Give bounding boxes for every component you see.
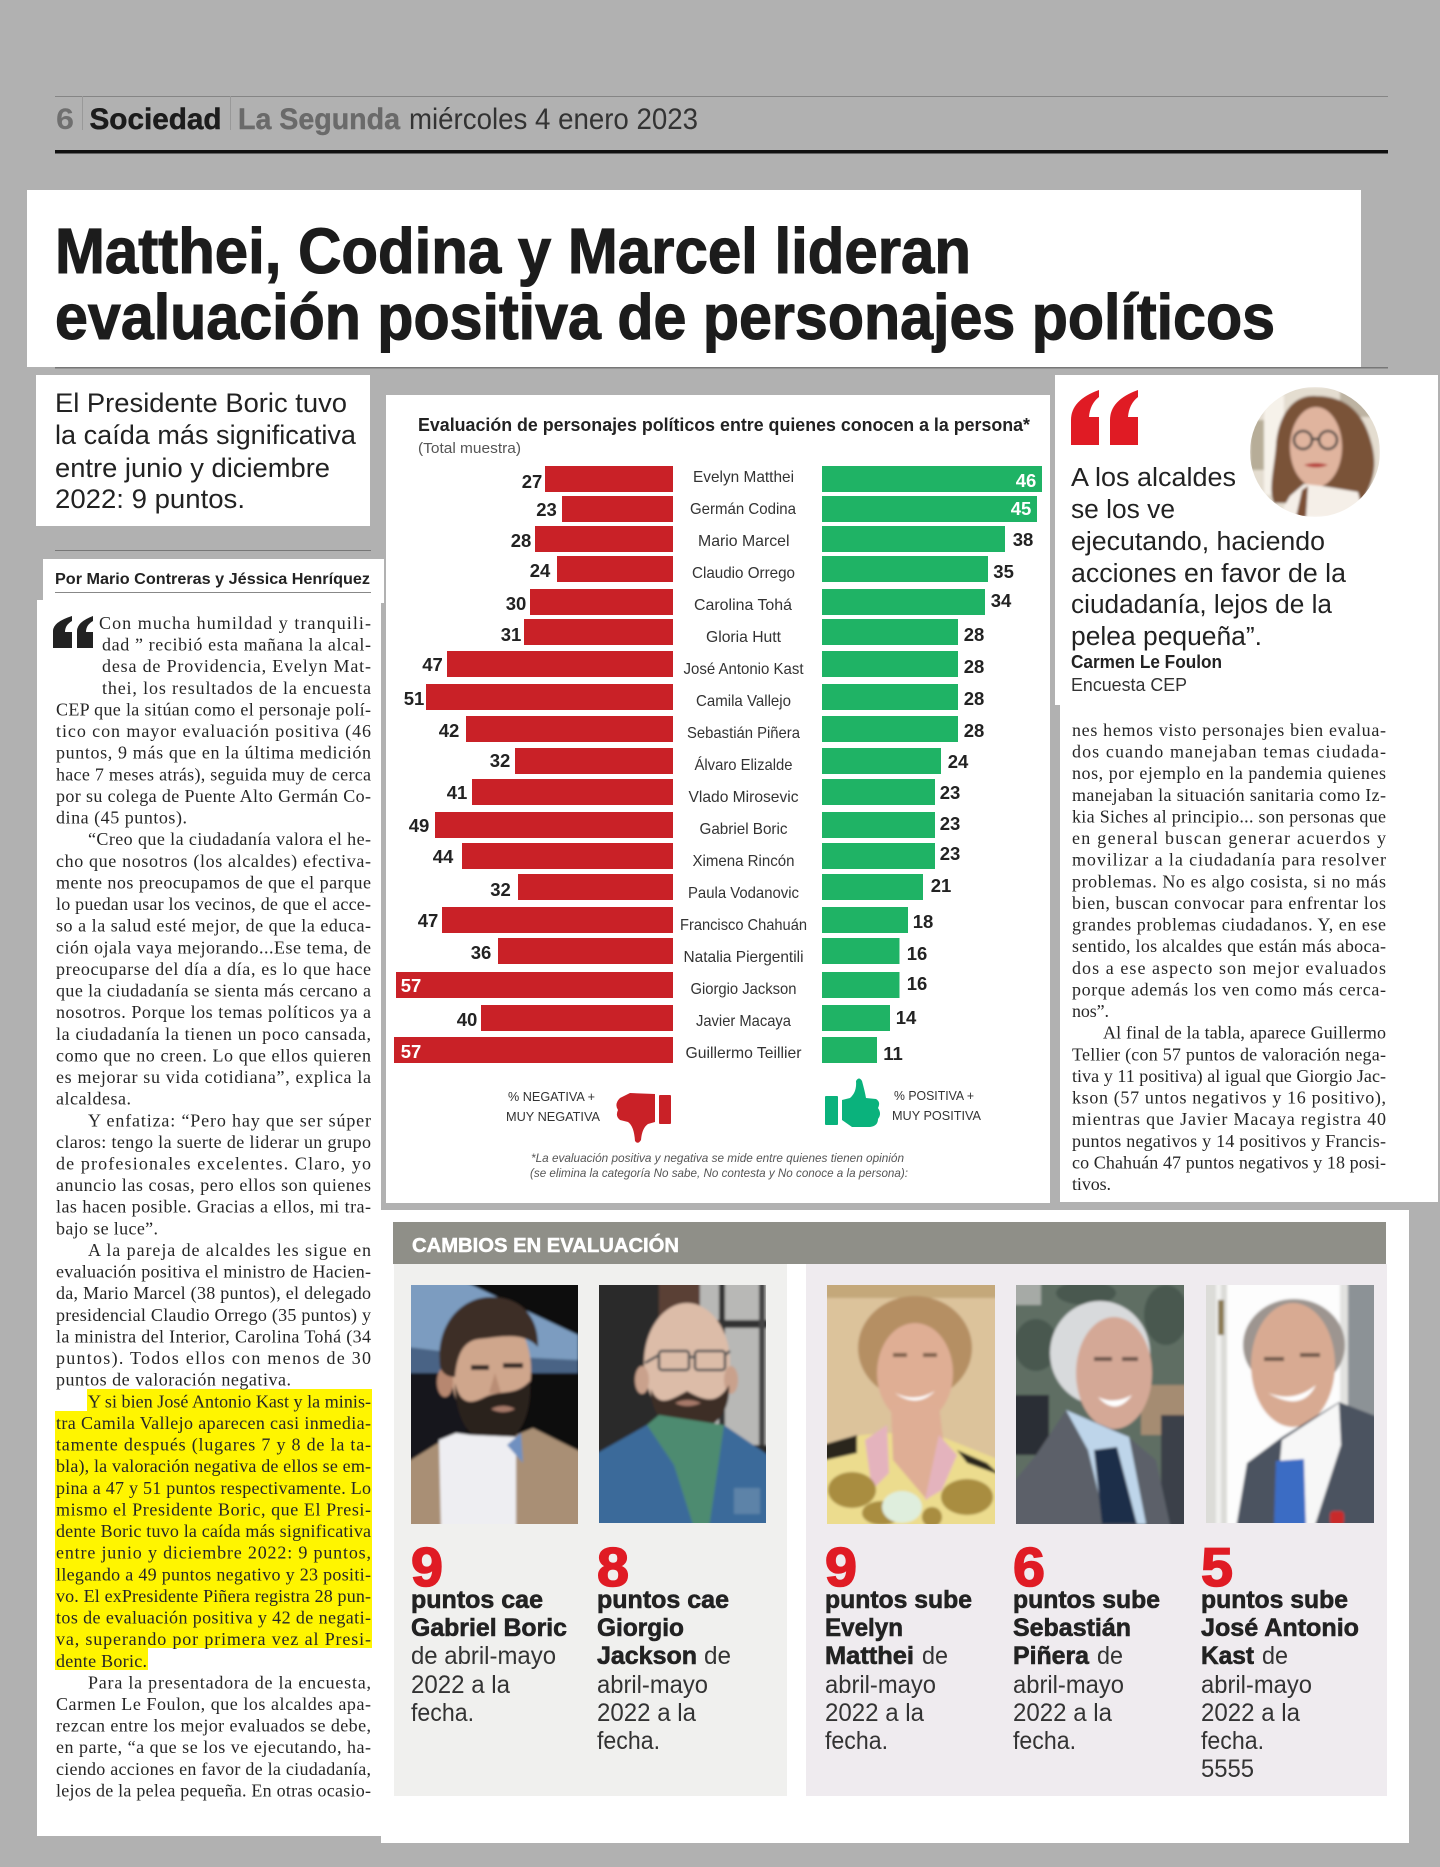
card: José Antonio Kast: 5555	[1201, 1755, 1254, 1783]
card: José Antonio Kast: de	[1262, 1642, 1288, 1670]
panel: right article column: movilizar a la ciudadanía para resolver	[1072, 850, 1386, 870]
panel: right article column: nos”.	[1072, 1001, 1109, 1021]
panel: right article column: kson (57 untos negativos y 16 positivo),	[1072, 1088, 1386, 1108]
card: Giorgio Jackson: Giorgio	[597, 1614, 684, 1642]
chart subtitle: (Total muestra)	[418, 440, 521, 457]
page header: folio and date: La Segunda	[238, 103, 400, 136]
article body text, left column: thei, los resultados de la encuesta	[102, 678, 371, 698]
quote text: pelea pequeña”.	[1071, 623, 1262, 651]
row: Camila Vallejo	[404, 684, 984, 710]
article body text, left column: la ministra del Interior, Carolina Tohá (34	[56, 1326, 371, 1348]
row: Camila Vallejo: 51	[404, 688, 424, 709]
row: Mario Marcel: 38	[1013, 529, 1033, 550]
article body text, left column: llegando a 49 puntos negativo y 23 positi-	[56, 1564, 371, 1584]
card: Gabriel Boric: de abril-mayo	[411, 1642, 556, 1670]
row: Sebastián Piñera: Sebastián Piñera	[687, 725, 800, 742]
article body text, left column: ción ojala vaya mejorando...Ese tema, de	[56, 937, 371, 957]
article body text, left column: puntos, 9 más que en la última medición	[56, 743, 371, 763]
card: Evelyn Matthei: fecha.	[825, 1727, 888, 1755]
photo: Evelyn Matthei	[827, 1285, 995, 1524]
row: Carolina Tohá	[506, 589, 1012, 615]
row: Gloria Hutt: 31	[501, 624, 521, 645]
row: Evelyn Matthei: 46	[1016, 470, 1036, 491]
card: José Antonio Kast: Kast	[1201, 1642, 1255, 1670]
page header: folio and date: Sociedad	[90, 103, 222, 136]
panel: right article column: tivos.	[1072, 1174, 1111, 1194]
chart footnote: *La evaluación positiva y negativa se mide entre quienes tienen opinión	[531, 1151, 904, 1165]
article body text, left column: “Creo que la ciudadanía valora el he-	[88, 829, 371, 849]
row: Gabriel Boric: 23	[940, 813, 960, 834]
row: Francisco Chahuán	[418, 907, 933, 934]
row: Natalia Piergentili: Natalia Piergentili	[684, 949, 804, 966]
title panel: Matthei, Codina y Marcel lideran	[55, 215, 971, 287]
card: Sebastián Piñera: 2022 a la	[1013, 1699, 1112, 1727]
panel: right article column: mientras que Javier Macaya registra 40	[1072, 1109, 1386, 1129]
row: Vlado Mirosevic: Vlado Mirosevic	[688, 789, 798, 806]
article body text, left column: bajo se luce”.	[56, 1218, 158, 1238]
row: Gabriel Boric: Gabriel Boric	[700, 821, 788, 838]
photo: Giorgio Jackson	[599, 1285, 766, 1523]
row: Evelyn Matthei: 27	[522, 471, 542, 492]
row: Giorgio Jackson: Giorgio Jackson	[690, 981, 796, 998]
row: Germán Codina	[536, 496, 1037, 522]
row: Gabriel Boric: 49	[409, 815, 429, 836]
row: Mario Marcel: Mario Marcel	[698, 533, 790, 550]
row: Gloria Hutt: 28	[964, 624, 984, 645]
row: Álvaro Elizalde: 24	[948, 751, 969, 772]
card: José Antonio Kast: puntos sube	[1201, 1586, 1348, 1614]
card: Evelyn Matthei: 9	[825, 1536, 857, 1598]
card: José Antonio Kast: abril-mayo	[1201, 1671, 1312, 1699]
row: Sebastián Piñera: 28	[964, 720, 984, 741]
photo: Sebastián Piñera	[1016, 1285, 1184, 1524]
row: Álvaro Elizalde: Álvaro Elizalde	[694, 755, 793, 774]
chart title: Evaluación de personajes políticos entre quienes conocen a la persona*	[418, 415, 1030, 435]
card: José Antonio Kast: 2022 a la	[1201, 1699, 1300, 1727]
title panel	[27, 190, 1361, 367]
row: Javier Macaya: 14	[896, 1007, 917, 1028]
row: Gloria Hutt: Gloria Hutt	[706, 629, 782, 646]
panel: right article column: porque además los ven como más cerca-	[1072, 979, 1386, 999]
card: Giorgio Jackson: 8	[597, 1536, 629, 1598]
row: Francisco Chahuán: Francisco Chahuán	[680, 917, 807, 934]
panel: right article column: tiva y 11 positiva) al igual que Giorgio Jac-	[1072, 1066, 1386, 1087]
row: Álvaro Elizalde	[490, 748, 969, 774]
subheading panel: entre junio y diciembre	[55, 453, 330, 483]
panel: right article column: co Chahuán 47 puntos negativos y 18 posi-	[1072, 1152, 1386, 1172]
row: Camila Vallejo: Camila Vallejo	[696, 693, 791, 710]
row: Francisco Chahuán: 47	[418, 910, 438, 931]
article body text, left column: entre junio y diciembre 2022: 9 puntos,	[56, 1543, 371, 1563]
row: Francisco Chahuán: 18	[913, 911, 933, 932]
card: Giorgio Jackson: abril-mayo	[597, 1671, 708, 1699]
panel: cambios en evaluación	[381, 1210, 1409, 1843]
article body text, left column: la ciudadanía la tienen un poco cansada,	[56, 1024, 371, 1044]
row: Javier Macaya: Javier Macaya	[696, 1013, 791, 1030]
article body text, left column: rezcan entre los mejor evaluados se debe,	[56, 1716, 371, 1736]
panel: right article column: nos, por ejemplo en la pandemia quienes	[1072, 763, 1386, 783]
row: Germán Codina: 23	[536, 499, 557, 520]
article body text, left column: so a la salud esté mejor, de que la educa-	[56, 916, 371, 936]
page header: folio and date: 6	[56, 103, 74, 136]
legend: positive: MUY POSITIVA	[892, 1108, 981, 1123]
highlighted paragraph background	[55, 1389, 372, 1670]
row: Carolina Tohá: 30	[506, 593, 526, 614]
card: Evelyn Matthei	[825, 1536, 972, 1755]
row: Camila Vallejo: 28	[964, 688, 984, 709]
page header: folio and date: miércoles 4 enero 2023	[409, 103, 698, 136]
page header: folio and date	[55, 96, 1388, 154]
article body text, left column: por su colega de Puente Alto Germán Co-	[56, 786, 371, 806]
panel: diverging bar chart	[386, 395, 1050, 1203]
card: Giorgio Jackson: fecha.	[597, 1727, 660, 1755]
row: Carolina Tohá: 34	[991, 590, 1012, 611]
card: José Antonio Kast	[1201, 1536, 1359, 1783]
subheading panel: la caída más significativa	[55, 420, 356, 450]
article body text, left column: tico con mayor evaluación positiva (46	[56, 721, 371, 742]
panel: right article column: bien, buscan convocar para enfrentar los	[1072, 893, 1386, 913]
card: Giorgio Jackson: puntos cae	[597, 1586, 729, 1614]
icon: thumbs down	[616, 1093, 671, 1143]
row: Álvaro Elizalde: 32	[490, 750, 510, 771]
row: Natalia Piergentili: 36	[471, 942, 491, 963]
panel: right article column: en general buscan generar acuerdos y	[1072, 828, 1386, 848]
icon: opening quote mark	[53, 616, 93, 648]
article body text, left column: va, superando por primera vez al Presi-	[56, 1629, 371, 1649]
card: Gabriel Boric	[411, 1536, 567, 1727]
card: Sebastián Piñera: puntos sube	[1013, 1586, 1160, 1614]
row: Natalia Piergentili: 16	[907, 943, 927, 964]
row: Guillermo Teillier: 57	[401, 1041, 421, 1062]
panel: right article column: Al final de la tabla, aparece Guillermo	[1103, 1023, 1386, 1043]
panel: right article column: dos cuando manejaban temas ciudada-	[1072, 742, 1386, 762]
chart footnote	[530, 1151, 908, 1180]
legend: positive: % POSITIVA +	[894, 1088, 974, 1103]
row: Mario Marcel: 28	[511, 530, 531, 551]
card: Giorgio Jackson: Jackson	[597, 1642, 697, 1670]
icon: red quote mark	[1071, 390, 1138, 445]
card: Sebastián Piñera: 6	[1013, 1536, 1045, 1598]
quote text: acciones en favor de la	[1071, 560, 1347, 588]
row: Ximena Rincón: 44	[433, 846, 454, 867]
row: José Antonio Kast	[422, 651, 984, 678]
row: Germán Codina: 45	[1011, 498, 1031, 519]
row: José Antonio Kast: José Antonio Kast	[684, 661, 804, 678]
article body text, left column: Con mucha humildad y tranquili-	[99, 613, 371, 633]
card: Sebastián Piñera	[1013, 1536, 1160, 1755]
row: Claudio Orrego	[530, 556, 1014, 582]
card: Evelyn Matthei: 2022 a la	[825, 1699, 924, 1727]
article body text, left column: lo puedan usar los vecinos, de que el acce-	[56, 894, 371, 914]
article body text, left column: bla), la valoración negativa de ellos se em-	[56, 1456, 371, 1477]
row: Gabriel Boric	[409, 812, 960, 838]
card: José Antonio Kast: José Antonio	[1201, 1614, 1359, 1642]
portrait: Carmen Le Foulon	[1250, 387, 1380, 517]
section header bar: CAMBIOS EN EVALUACIÓN	[412, 1233, 679, 1257]
left article column	[37, 559, 384, 1836]
quote text	[1071, 464, 1347, 651]
card: Evelyn Matthei: Matthei	[825, 1642, 914, 1670]
article body text, left column: anuncio las cosas, pero ellos son quienes	[56, 1175, 371, 1195]
row: Sebastián Piñera	[439, 716, 984, 742]
card: José Antonio Kast: 5	[1201, 1536, 1233, 1598]
article body text, left column: dina (45 puntos).	[56, 808, 187, 829]
row: Giorgio Jackson: 16	[907, 973, 927, 994]
article body text, left column: cho que nosotros (los alcaldes) efectiva-	[56, 851, 371, 872]
row: Mario Marcel	[511, 526, 1033, 552]
row: Carolina Tohá: Carolina Tohá	[694, 597, 792, 614]
article body text, left column: nosotros. Porque los temas políticos ya a	[56, 1002, 371, 1022]
card: Sebastián Piñera: Piñera	[1013, 1642, 1090, 1670]
article body text, left column: dente Boric tuvo la caída más significativa	[56, 1521, 371, 1541]
article body text, left column: vo. El exPresidente Piñera registra 28 pun-	[56, 1586, 371, 1606]
article body text, left column: CEP que la sitúan como el personaje polí-	[56, 700, 371, 720]
article body text, left column: claros: tengo la suerte de liderar un grupo	[56, 1132, 371, 1152]
subheading panel	[36, 375, 370, 526]
row: Javier Macaya: 40	[457, 1009, 477, 1030]
panel: right article column: puntos negativos y 14 positivos y Francis-	[1072, 1131, 1386, 1151]
row: Vlado Mirosevic	[447, 779, 960, 806]
byline	[43, 559, 384, 603]
article body text, left column: Y enfatiza: “Pero hay que ser súper	[88, 1110, 371, 1130]
row: Evelyn Matthei: Evelyn Matthei	[693, 469, 794, 486]
legend: negative: MUY NEGATIVA	[506, 1109, 600, 1124]
panel: right article column: nes hemos visto personajes bien evalua-	[1072, 720, 1386, 740]
row: Ximena Rincón: Ximena Rincón	[692, 853, 794, 870]
row: Vlado Mirosevic: 41	[447, 782, 467, 803]
row: Claudio Orrego: 24	[530, 560, 551, 581]
row: Natalia Piergentili	[471, 938, 927, 966]
quote text: A los alcaldes	[1071, 464, 1236, 492]
article body text, left column: mismo el Presidente Boric, que El Presi-	[56, 1499, 371, 1519]
row: Evelyn Matthei	[522, 466, 1042, 492]
article body text, left column: alcaldesa.	[56, 1089, 131, 1109]
article body text, left column: Y si bien José Antonio Kast y la minis-	[88, 1391, 371, 1411]
panel: right article column: dos a ese aspecto son mejor evaluados	[1072, 958, 1386, 978]
card: Evelyn Matthei: Evelyn	[825, 1614, 903, 1642]
card: Giorgio Jackson	[597, 1536, 731, 1755]
article body text, left column: preocuparse del día a día, es lo que hace	[56, 959, 371, 979]
row: Ximena Rincón: 23	[940, 843, 960, 864]
panel: pull quote	[1055, 375, 1438, 705]
article body text, left column	[56, 613, 371, 1800]
article body text, left column: Carmen Le Foulon, que los alcaldes apa-	[56, 1694, 371, 1714]
card: Evelyn Matthei: puntos sube	[825, 1586, 972, 1614]
icon: thumbs up	[825, 1078, 880, 1127]
card: Evelyn Matthei: abril-mayo	[825, 1671, 936, 1699]
article body text, left column: dad ” recibió esta mañana la alcal-	[102, 635, 371, 655]
article body text, left column: mente nos preocupamos de que el parque	[56, 872, 371, 892]
chart footnote: (se elimina la categoría No sabe, No contesta y No conoce a la persona):	[530, 1166, 908, 1180]
photo: Gabriel Boric	[411, 1285, 578, 1524]
article body text, left column: es mejorar su vida cotidiana”, explica la	[56, 1067, 371, 1087]
article body text, left column: presidencial Claudio Orrego (35 puntos) y	[56, 1305, 371, 1326]
article body text, left column: puntos). Todos ellos con menos de 30	[56, 1348, 371, 1369]
row: Giorgio Jackson	[396, 972, 927, 998]
card: Giorgio Jackson: de	[704, 1642, 731, 1670]
card: Gabriel Boric: 2022 a la	[411, 1671, 510, 1699]
article body text, left column: ciendo acciones en favor de la ciudadanía,	[56, 1759, 371, 1779]
quote text: ciudadanía, lejos de la	[1071, 591, 1333, 619]
row: Claudio Orrego: 35	[993, 561, 1014, 582]
section header bar	[393, 1222, 1386, 1264]
article body text, left column: de profesionales excelentes. Claro, yo	[56, 1154, 371, 1174]
legend: positive	[825, 1078, 981, 1127]
card: Gabriel Boric: 9	[411, 1536, 443, 1598]
row: Ximena Rincón	[433, 843, 960, 870]
article body text, left column: como que no creen. Lo que ellos quieren	[56, 1045, 371, 1065]
article body text, left column: tra Camila Vallejo aparecen casi inmedia-	[56, 1413, 371, 1433]
article body text, left column: puntos de valoración negativa.	[56, 1370, 291, 1390]
quote attribution: Carmen Le Foulon	[1071, 652, 1222, 672]
row: Guillermo Teillier	[394, 1037, 903, 1064]
panel: right article column	[1060, 705, 1438, 1202]
panel: right article column: manejaban la situación sanitaria como Iz-	[1072, 785, 1386, 805]
quote attribution: Encuesta CEP	[1071, 675, 1187, 695]
legend: negative	[506, 1089, 671, 1143]
row: Vlado Mirosevic: 23	[940, 782, 960, 803]
title panel: evaluación positiva de personajes políticos	[55, 281, 1275, 353]
card: Sebastián Piñera: Sebastián	[1013, 1614, 1131, 1642]
quote text: se los ve	[1071, 496, 1175, 524]
card: Sebastián Piñera: abril-mayo	[1013, 1671, 1124, 1699]
row: Paula Vodanovic	[490, 874, 951, 902]
card: Gabriel Boric: puntos cae	[411, 1586, 543, 1614]
article body text, left column: evaluación positiva el ministro de Hacien-	[56, 1262, 371, 1282]
byline: Por Mario Contreras y Jéssica Henríquez	[55, 571, 370, 588]
row: Guillermo Teillier: Guillermo Teillier	[686, 1045, 802, 1062]
article body text, left column: da, Mario Marcel (38 puntos), el delegado	[56, 1283, 371, 1304]
article body text, left column: las hacen posible. Gracias a ellos, mi tra-	[56, 1197, 371, 1217]
article body text, left column: Para la presentadora de la encuesta,	[88, 1672, 371, 1692]
card: Gabriel Boric: Gabriel Boric	[411, 1614, 567, 1642]
article body text, left column: en parte, “a que se los ve ejecutando, ha-	[56, 1737, 371, 1757]
row: Gloria Hutt	[501, 619, 984, 646]
row: Paula Vodanovic: Paula Vodanovic	[688, 885, 799, 902]
article body text, left column: desa de Providencia, Evelyn Mat-	[102, 656, 371, 676]
article body text, left column: que la ciudadanía se sienta más cercano a	[56, 980, 371, 1000]
row: Javier Macaya	[457, 1005, 917, 1031]
card: Sebastián Piñera: fecha.	[1013, 1727, 1076, 1755]
row: Sebastián Piñera: 42	[439, 720, 459, 741]
article body text, left column: pina a 47 y 51 puntos respectivamente. Lo	[56, 1478, 371, 1498]
row: Paula Vodanovic: 32	[490, 879, 511, 900]
panel: right article column: sentido, los alcaldes que están más aboca-	[1072, 936, 1386, 956]
subheading panel: 2022: 9 puntos.	[55, 484, 245, 514]
article body text, left column: dente Boric.	[56, 1651, 147, 1671]
card: Sebastián Piñera: de	[1097, 1642, 1123, 1670]
article body text, left column: A la pareja de alcaldes les sigue en	[88, 1240, 371, 1260]
panel: right article column: problemas. No es algo cosista, si no más	[1072, 871, 1386, 891]
card: Evelyn Matthei: de	[922, 1642, 948, 1670]
subheading panel: El Presidente Boric tuvo	[55, 388, 347, 418]
row: Guillermo Teillier: 11	[883, 1043, 903, 1064]
card: Gabriel Boric: fecha.	[411, 1699, 474, 1727]
article body text, left column: tamente después (lugares 7 y 8 de la ta-	[56, 1435, 371, 1456]
row: Paula Vodanovic: 21	[931, 875, 951, 896]
row: Giorgio Jackson: 57	[401, 975, 421, 996]
photo: José Antonio Kast	[1206, 1285, 1374, 1523]
row: Claudio Orrego: Claudio Orrego	[692, 565, 795, 582]
row: Germán Codina: Germán Codina	[690, 501, 796, 518]
card: José Antonio Kast: fecha.	[1201, 1727, 1264, 1755]
quote text: ejecutando, haciendo	[1071, 528, 1325, 556]
card: Giorgio Jackson: 2022 a la	[597, 1699, 696, 1727]
panel: right article column: kia Siches al principio... son personas que	[1072, 806, 1386, 826]
panel: right article column: grandes problemas ciudadanos. Y, en ese	[1072, 915, 1386, 935]
row: José Antonio Kast: 28	[964, 656, 984, 677]
quote attribution	[1071, 652, 1222, 695]
legend: negative: % NEGATIVA +	[508, 1089, 595, 1104]
article body text, left column: tos de evaluación positiva y 42 de negati-	[56, 1608, 371, 1628]
panel: right article column: Tellier (con 57 puntos de valoración nega-	[1072, 1044, 1386, 1065]
article body text, left column: lejos de la pelea pequeña. En otras ocasio-	[56, 1780, 371, 1800]
row: José Antonio Kast: 47	[422, 654, 443, 675]
article body text, left column: hace 7 meses atrás), seguida muy de cerca	[56, 764, 371, 785]
